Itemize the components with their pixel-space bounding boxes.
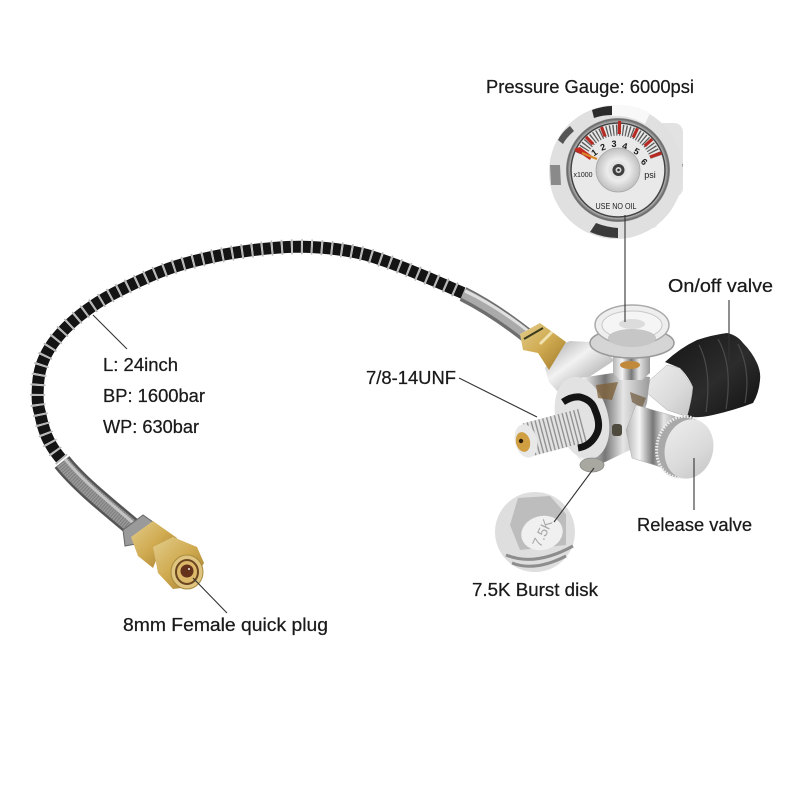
gauge stem [613, 357, 650, 380]
gauge face [571, 123, 665, 217]
O-ring [563, 397, 599, 448]
leader: quick plug [193, 578, 227, 613]
hose assembly [38, 247, 532, 530]
center dial [596, 148, 640, 192]
on/off knob [665, 333, 760, 417]
hex shoulder [510, 496, 566, 550]
scale numbers: 3 [611, 139, 617, 149]
leader: on/off valve [728, 300, 730, 362]
valve body [511, 305, 760, 484]
gauge side view [590, 305, 674, 358]
needle [582, 153, 597, 159]
psi unit: psi [644, 170, 656, 180]
leader: hose specs [93, 315, 127, 349]
disk marking: 7.5K [529, 516, 556, 549]
scale numbers: 2 [599, 142, 607, 153]
central block [560, 373, 650, 463]
disk face [517, 511, 567, 555]
brass tip [511, 422, 541, 460]
label: on/off valve: On/off valve [668, 275, 773, 296]
x1000: x1000 [573, 172, 593, 179]
burst disk port [580, 458, 604, 472]
mounting disc [546, 371, 618, 465]
scale numbers: 6 [639, 157, 649, 167]
chrome housing [549, 105, 683, 239]
hub [612, 164, 624, 176]
scale ticks [581, 130, 656, 157]
upper block [545, 341, 615, 392]
scale numbers: 5 [632, 146, 641, 157]
spec: burst pressure: BP: 1600bar [103, 385, 205, 406]
leader: thread [459, 378, 537, 417]
label: burst disk: 7.5K Burst disk [472, 579, 599, 600]
red zone [574, 147, 592, 160]
red major ticks [576, 121, 662, 157]
hose: upper steel sleeve [463, 291, 532, 338]
leader lines [93, 215, 729, 613]
scale numbers: 1 [589, 147, 599, 158]
leader: release valve [693, 458, 695, 510]
spec: length: L: 24inch [103, 354, 178, 375]
scale numbers: 4 [621, 141, 628, 152]
threaded stem [527, 425, 584, 440]
label: quick plug: 8mm Female quick plug [123, 614, 328, 635]
reflections [596, 382, 646, 436]
label: pressure gauge: Pressure Gauge: 6000psi [486, 76, 694, 97]
label: release valve: Release valve [637, 514, 752, 535]
scale numbers [589, 139, 649, 167]
hose specifications [103, 354, 205, 437]
hose brass connector [520, 323, 566, 370]
quick plug connector [123, 515, 204, 589]
hose: black tube with spring coil [38, 247, 463, 460]
leader: burst disk [554, 468, 594, 522]
label: thread size: 7/8-14UNF [366, 367, 456, 388]
thread lines [506, 546, 573, 566]
hose: lower steel sleeve [62, 459, 138, 530]
spec: working pressure: WP: 630bar [103, 416, 199, 437]
plug face [171, 555, 203, 589]
gauge rim [566, 118, 670, 222]
release valve [626, 405, 720, 484]
steel nut [123, 515, 153, 546]
brass hex [131, 521, 177, 568]
on/off valve neck [647, 365, 693, 417]
use no oil: USE NO OIL [596, 202, 637, 211]
burst disk detail [495, 492, 575, 572]
leader: pressure gauge [624, 215, 626, 322]
brass front [153, 537, 204, 589]
disk photo circle [495, 492, 575, 572]
pressure gauge detail [549, 105, 683, 239]
